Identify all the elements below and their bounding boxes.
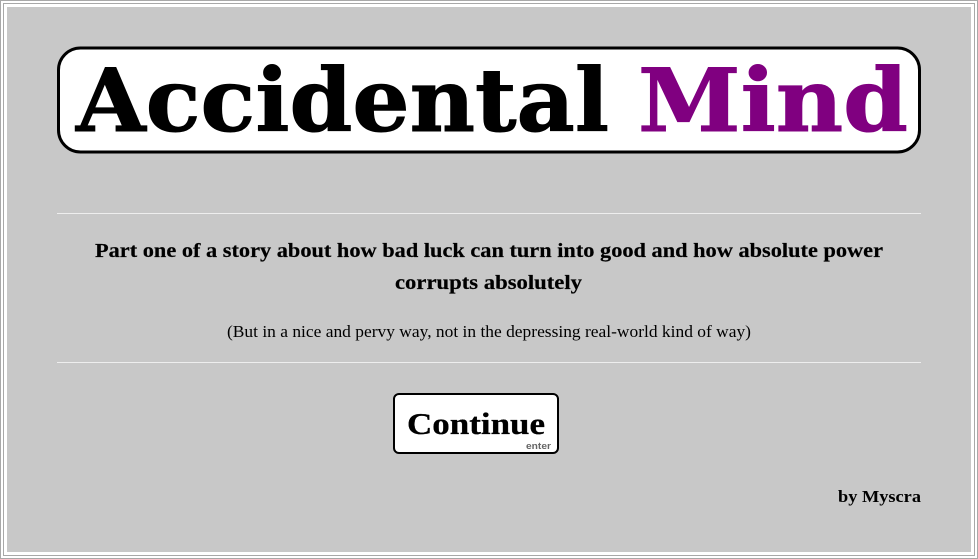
continue button (394, 394, 558, 453)
continue button: Continue (407, 406, 545, 441)
title (58, 48, 920, 152)
continue button: enter (526, 441, 551, 452)
parenthetical note: (But in a nice and pervy way, not in the depressing real-world kind of way) (227, 322, 751, 341)
subtitle (95, 240, 883, 294)
title: Accidental (75, 49, 609, 152)
subtitle: Part one of a story about how bad luck can turn into good and how absolute power (95, 240, 883, 262)
title: Mind (638, 49, 908, 152)
author credit: by Myscra (838, 487, 921, 506)
subtitle: corrupts absolutely (395, 272, 582, 294)
